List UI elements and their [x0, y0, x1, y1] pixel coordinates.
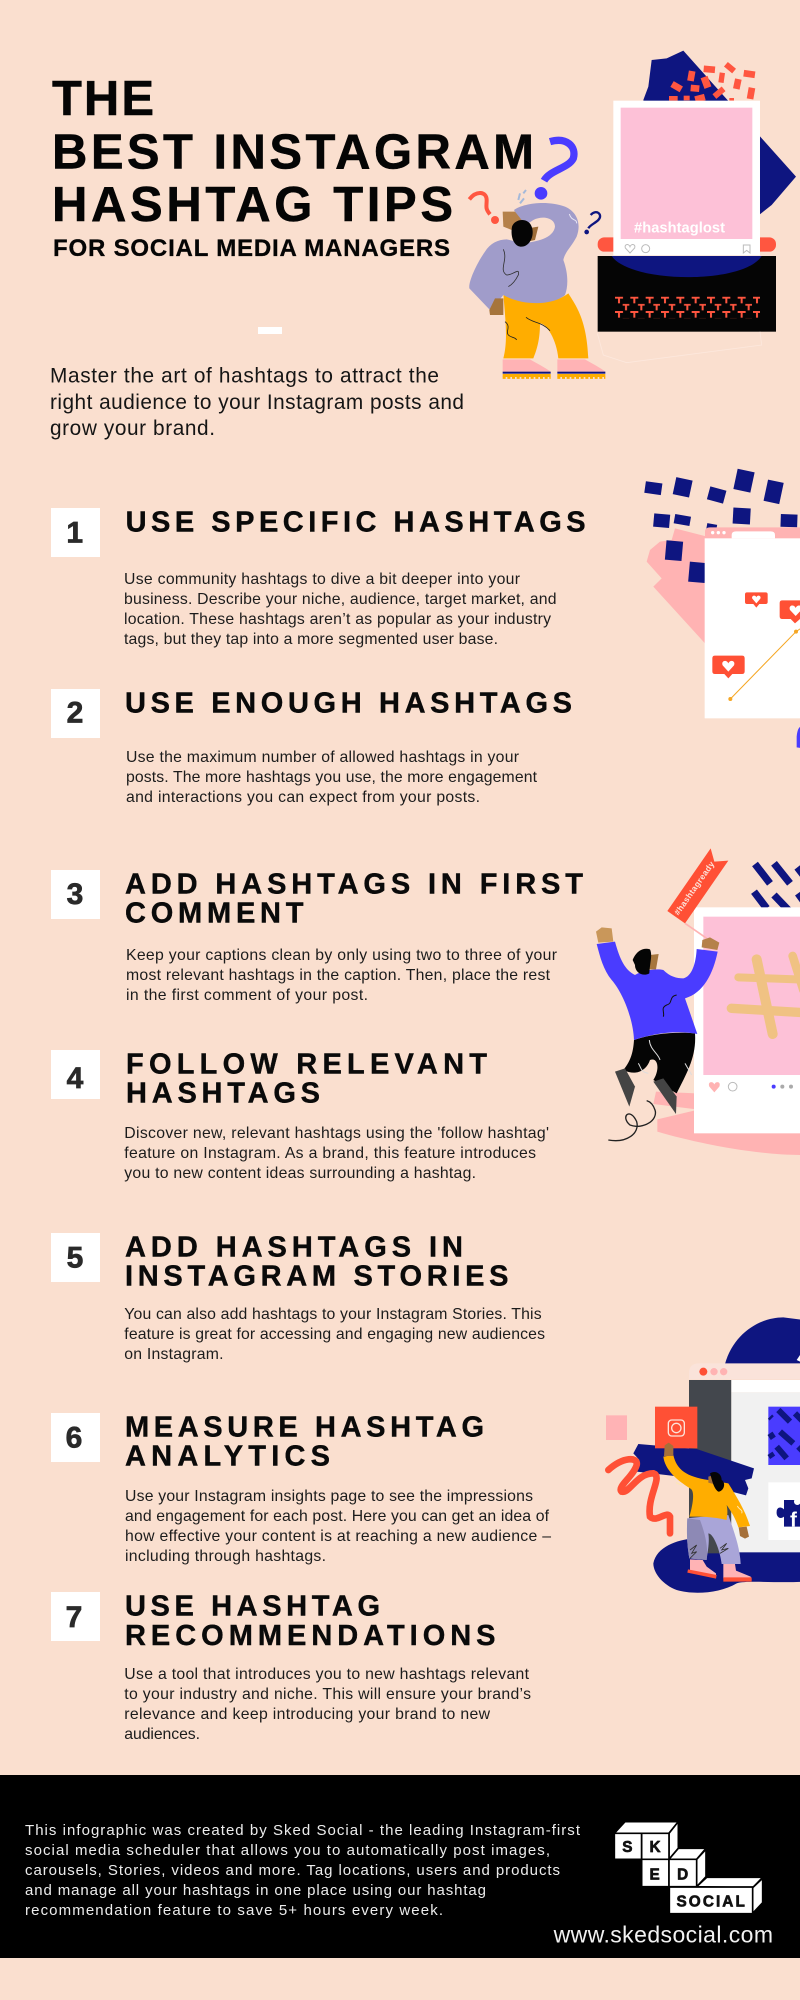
- tip 7: to your industry and niche. This will ensure your brand’s: [124, 1686, 531, 1703]
- number box 2: [51, 689, 100, 738]
- number box 3: [51, 870, 100, 919]
- tip 7: 7: [66, 1601, 82, 1634]
- number box 5: [51, 1233, 100, 1282]
- website url: www.skedsocial.com: [553, 1922, 773, 1948]
- tip 4: you to new content ideas surrounding a hashtag.: [124, 1165, 476, 1182]
- tip 7: audiences.: [124, 1726, 200, 1743]
- illustration: person with hashtag flag: #hashtagready: [672, 859, 717, 917]
- footer text: This infographic was created by Sked Social - the leading Instagram-first: [25, 1822, 581, 1839]
- logo: Sked Social blocks: E: [650, 1866, 660, 1883]
- intro text: Master the art of hashtags to attract the: [50, 365, 439, 388]
- tip 3: COMMENT: [125, 898, 304, 930]
- footer text: carousels, Stories, videos and more. Tag locations, users and products: [25, 1862, 560, 1879]
- tip 7: USE HASHTAG: [125, 1591, 380, 1623]
- tip 6: ANALYTICS: [125, 1441, 330, 1473]
- tip 6: [51, 1412, 551, 1565]
- illustration: person reaching for Instagram tile: f: [790, 1509, 797, 1532]
- tip 1: business. Describe your niche, audience, target market, and: [124, 591, 556, 608]
- tip 7: relevance and keep introducing your brand to new: [124, 1706, 491, 1723]
- tip 6: and engagement for each post. Here you can get an idea of: [125, 1508, 550, 1525]
- tip 4: feature on Instagram. As a brand, this feature introduces: [124, 1145, 536, 1162]
- tip 2: Use the maximum number of allowed hashtags in your: [126, 749, 519, 766]
- tip 4: Discover new, relevant hashtags using the 'follow hashtag': [124, 1125, 549, 1142]
- tip 3: ADD HASHTAGS IN FIRST: [125, 869, 583, 901]
- white dash: [258, 327, 282, 334]
- tip 2: 2: [67, 697, 83, 730]
- tip 1: tags, but they tap into a more segmented user base.: [124, 631, 498, 648]
- tip 3: most relevant hashtags in the caption. Then, place the rest: [126, 967, 551, 984]
- tip 7: Use a tool that introduces you to new hashtags relevant: [124, 1666, 530, 1683]
- tip 5: INSTAGRAM STORIES: [125, 1261, 508, 1293]
- tip 3: Keep your captions clean by only using two to three of your: [126, 947, 557, 964]
- tip 7: [51, 1591, 531, 1743]
- tip 5: [51, 1231, 545, 1363]
- tip 4: 4: [67, 1062, 84, 1095]
- tip 3: [51, 869, 583, 1004]
- illustration: person with hashtag flag: [596, 848, 800, 1155]
- tip 1: 1: [66, 517, 83, 550]
- logo: Sked Social blocks: S: [622, 1839, 632, 1856]
- tip 2: posts. The more hashtags you use, the more engagement: [126, 769, 538, 786]
- tip 6: how effective your content is at reaching a new audience –: [125, 1528, 551, 1545]
- tip 3: in the first comment of your post.: [126, 987, 368, 1004]
- tip 1: USE SPECIFIC HASHTAGS: [126, 507, 586, 539]
- tip 5: You can also add hashtags to your Instagram Stories. This: [124, 1306, 542, 1323]
- tip 2: and interactions you can expect from your posts.: [126, 789, 480, 806]
- tip 2: USE ENOUGH HASHTAGS: [125, 688, 572, 720]
- tip 5: on Instagram.: [124, 1346, 224, 1363]
- intro text: right audience to your Instagram posts and: [50, 391, 464, 414]
- tip 4: HASHTAGS: [126, 1078, 320, 1110]
- tip 6: including through hashtags.: [125, 1548, 326, 1565]
- tip 6: MEASURE HASHTAG: [125, 1412, 484, 1444]
- footer text: recommendation feature to save 5+ hours every week.: [25, 1902, 443, 1919]
- title: [52, 72, 534, 232]
- tip 1: Use community hashtags to dive a bit deeper into your: [124, 571, 520, 588]
- tip 4: FOLLOW RELEVANT: [126, 1048, 487, 1080]
- illustration: person reaching for Instagram tile: [606, 1317, 800, 1593]
- intro text: grow your brand.: [50, 417, 215, 440]
- tip 1: location. These hashtags aren’t as popular as your industry: [124, 611, 551, 628]
- illustration: browser window with hearts: [644, 469, 800, 748]
- tip 2: [51, 688, 572, 806]
- tip 7: RECOMMENDATIONS: [125, 1620, 496, 1652]
- illustration: confused person with lost hashtag post: #hashtaglost: [634, 221, 725, 237]
- tip 5: ADD HASHTAGS IN: [125, 1231, 463, 1263]
- footer text: and manage all your hashtags in one place using our hashtag: [25, 1882, 486, 1899]
- illustration: confused person with lost hashtag post: [469, 51, 796, 378]
- title: BEST INSTAGRAM: [52, 125, 534, 179]
- logo: Sked Social blocks: D: [677, 1866, 688, 1883]
- tip 3: 3: [67, 878, 83, 911]
- logo: Sked Social blocks: K: [649, 1839, 661, 1856]
- number box 1: [51, 508, 100, 557]
- footer band: [0, 1775, 800, 1958]
- title: THE: [52, 72, 154, 126]
- footer text: social media scheduler that allows you to automatically post images,: [25, 1842, 550, 1859]
- logo: Sked Social blocks: [614, 1822, 763, 1914]
- subtitle: FOR SOCIAL MEDIA MANAGERS: [53, 235, 450, 262]
- intro text: [50, 365, 464, 440]
- tip 1: [51, 507, 586, 648]
- tip 4: [51, 1048, 549, 1182]
- tip 6: 6: [66, 1422, 82, 1455]
- footer text: [25, 1822, 581, 1919]
- tip 5: feature is great for accessing and engaging new audiences: [124, 1326, 545, 1343]
- number box 6: [51, 1413, 100, 1462]
- number box 7: [51, 1592, 100, 1641]
- title: HASHTAG TIPS: [52, 178, 453, 232]
- number box 4: [51, 1050, 100, 1099]
- tip 6: Use your Instagram insights page to see the impressions: [125, 1488, 533, 1505]
- tip 5: 5: [67, 1241, 83, 1274]
- logo: Sked Social blocks: SOCIAL: [676, 1894, 745, 1911]
